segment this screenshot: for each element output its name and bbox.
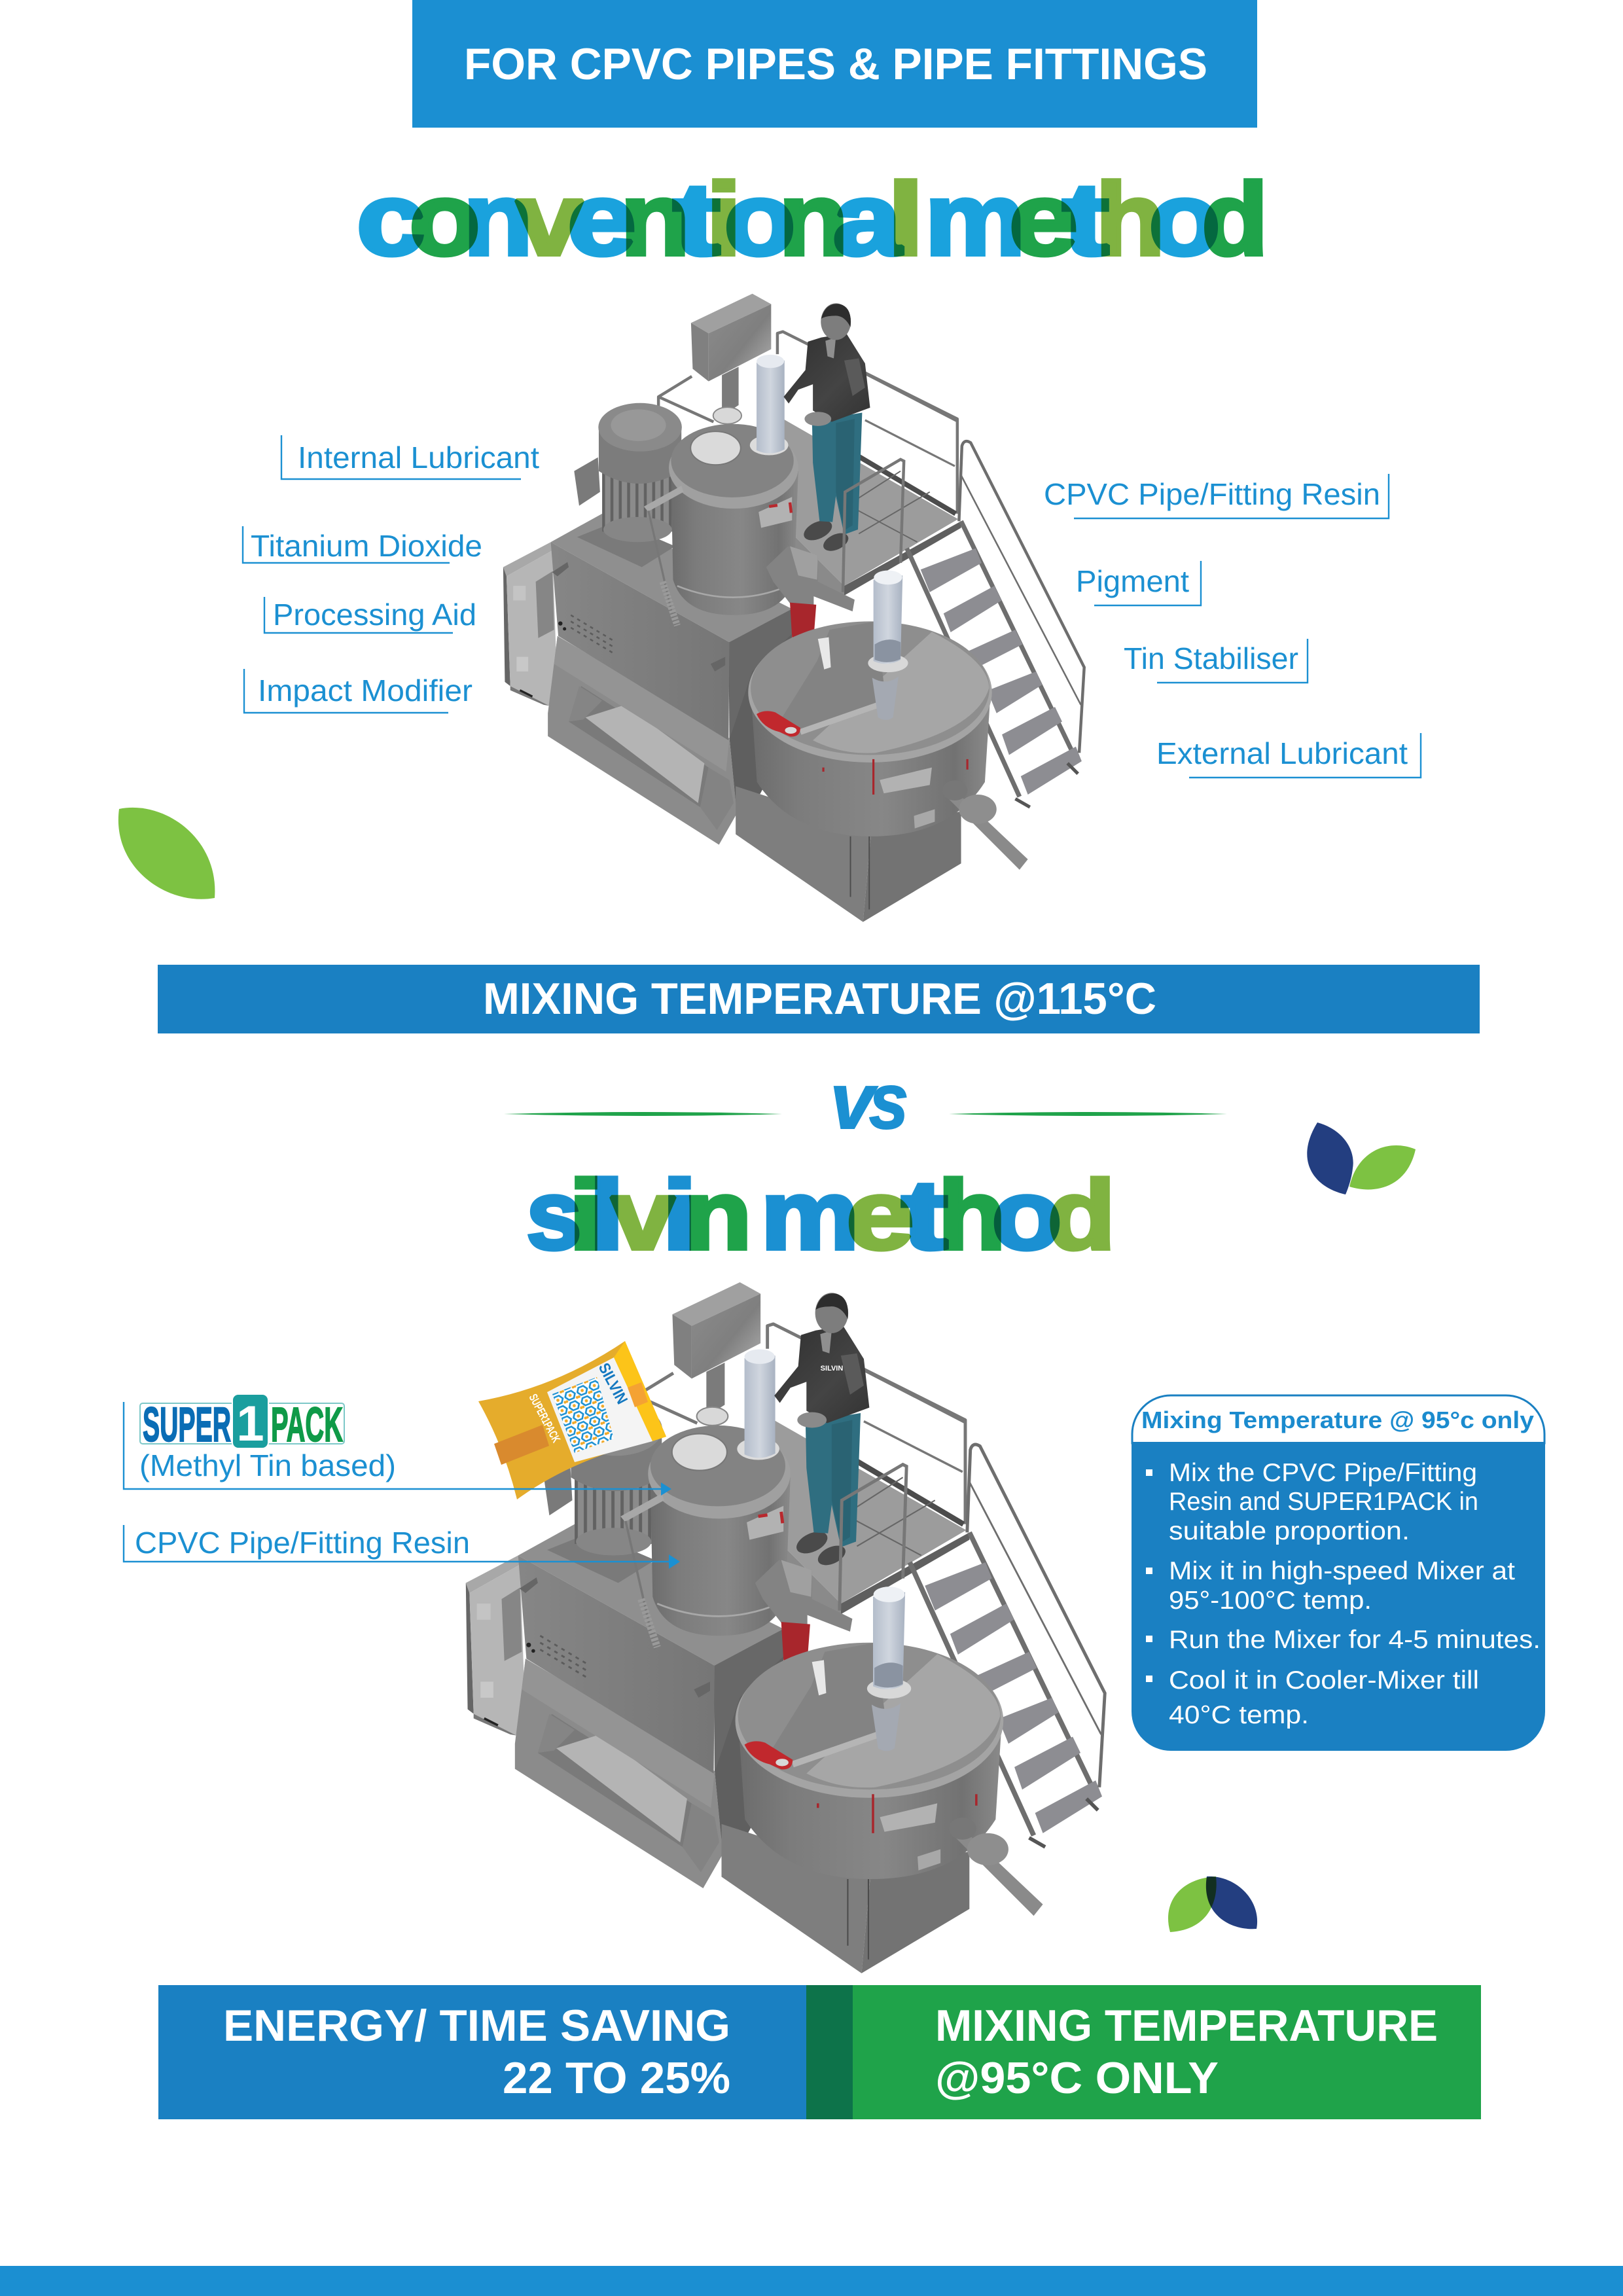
- heading: conventional method: l: [887, 162, 924, 277]
- step 4: 40°C temp.: [1169, 1701, 1309, 1729]
- ingredient label: Pigment: [1076, 561, 1201, 605]
- back railings: [658, 332, 957, 514]
- step 1: Mix the CPVC Pipe/Fitting: [1169, 1459, 1477, 1487]
- bottom banner: energy saving and mixing temperature: [158, 1985, 1481, 2119]
- footer bar: [0, 2266, 1623, 2296]
- logo: Super 1 Pack with methyl tin note: PACK: [271, 1397, 343, 1452]
- vs divider: v: [830, 1056, 878, 1145]
- glass measuring cylinder, upper: [750, 355, 788, 456]
- energy saving text: ENERGY/ TIME SAVING: [223, 2001, 730, 2051]
- illustration: silvin mixer machine: SILVIN: [821, 1365, 843, 1372]
- ingredient label: Impact Modifier: [244, 669, 473, 713]
- logo: Super 1 Pack with methyl tin note: 1: [236, 1396, 264, 1452]
- ingredient label: Internal Lubricant: Internal Lubricant: [298, 440, 539, 475]
- logo: Super 1 Pack with methyl tin note: SUPER: [143, 1397, 231, 1452]
- rear filler between base and cooler: [728, 609, 792, 816]
- mixing temperature text: [935, 2001, 1438, 2103]
- vs divider: [504, 1056, 1227, 1145]
- product bag: Super 1 Pack: [478, 1341, 666, 1499]
- step 2: 95°-100°C temp.: [1169, 1587, 1372, 1615]
- heading: silvin method: n: [684, 1160, 752, 1270]
- operator figure: [783, 303, 870, 554]
- cooler mixer pedestal: [736, 786, 961, 922]
- heading: silvin method: h: [938, 1160, 1006, 1270]
- logo: Super 1 Pack with methyl tin note: [124, 1394, 671, 1496]
- heading: silvin method: i: [662, 1160, 698, 1270]
- ingredient label: Titanium Dioxide: Titanium Dioxide: [251, 529, 482, 563]
- heading: conventional method: c: [357, 162, 425, 276]
- step 1: suitable proportion.: [1169, 1517, 1410, 1545]
- step 1: [1146, 1459, 1478, 1545]
- illustration: silvin mixer machine: [466, 1282, 1105, 1973]
- step 3: Run the Mixer for 4-5 minutes.: [1169, 1626, 1541, 1654]
- panel: process steps at 95 C: [1132, 1395, 1545, 1751]
- banner: mixing temperature 115 C: MIXING TEMPERATURE @115°C: [483, 974, 1156, 1024]
- platform floor: [779, 417, 961, 598]
- mixing temperature text: MIXING TEMPERATURE: [935, 2001, 1438, 2051]
- step 2: [1146, 1557, 1515, 1615]
- mixing temperature text: @95°C ONLY: [935, 2053, 1219, 2103]
- heading: silvin method: t: [902, 1160, 948, 1270]
- heading: conventional method: o: [409, 162, 480, 277]
- discharge Y-pipe with red coupling: [766, 547, 855, 642]
- base frame with legs: [548, 636, 737, 845]
- step 1: Resin and SUPER1PACK in: [1169, 1488, 1478, 1516]
- ingredient label: Tin Stabiliser: Tin Stabiliser: [1124, 641, 1298, 675]
- heading: silvin method: d: [1048, 1160, 1115, 1270]
- panel heading: Mixing Temperature @ 95°c only: [1141, 1407, 1534, 1433]
- ingredient label: CPVC Pipe/Fitting Resin: CPVC Pipe/Fitting Resin: [1044, 477, 1380, 511]
- heading: conventional method: o: [1149, 162, 1221, 277]
- heading: conventional method: m: [925, 162, 1026, 276]
- ingredient label: Processing Aid: Processing Aid: [273, 598, 476, 632]
- top banner: for CPVC pipes and pipe fittings: FOR CPVC PIPES & PIPE FITTINGS: [464, 39, 1207, 89]
- heading: conventional method: n: [463, 162, 533, 277]
- heading: silvin method: s: [526, 1160, 582, 1270]
- heading: silvin method: v: [611, 1160, 675, 1270]
- logo: Super 1 Pack with methyl tin note: (Methyl Tin based): [139, 1448, 396, 1482]
- heading: conventional method: t: [673, 162, 721, 277]
- heading: conventional method: [357, 161, 1268, 277]
- motor: [574, 403, 682, 567]
- upper high-speed mixer vessel: [644, 407, 798, 628]
- product bag: Super 1 Pack: SILVIN: [595, 1360, 631, 1407]
- label with arrow: CPVC Pipe/Fitting Resin: [124, 1525, 680, 1569]
- control box on a stand: [691, 294, 771, 416]
- heading: silvin method: l: [588, 1160, 625, 1270]
- ingredient label: Impact Modifier: Impact Modifier: [258, 673, 473, 708]
- heading: conventional method: e: [567, 161, 636, 276]
- top banner: for CPVC pipes and pipe fittings: [412, 0, 1257, 128]
- icon: green and navy leaves: [1168, 1876, 1257, 1932]
- heading: conventional method: t: [1062, 162, 1109, 277]
- heading: silvin method: i: [568, 1160, 604, 1270]
- vs divider: s: [869, 1058, 908, 1145]
- heading: conventional method: i: [705, 162, 742, 277]
- label with arrow: CPVC Pipe/Fitting Resin: CPVC Pipe/Fitting Resin: [135, 1526, 470, 1560]
- heading: conventional method: e: [1009, 161, 1078, 276]
- icon: navy and green leaves: [1307, 1122, 1416, 1194]
- heading: conventional method: n: [620, 162, 690, 277]
- discharge pipe and valve: [942, 780, 1028, 870]
- banner: mixing temperature 115 C: [158, 965, 1480, 1033]
- front short railing: [843, 459, 904, 592]
- lower glass measuring cylinder: [868, 571, 908, 720]
- heading: conventional method: n: [779, 162, 848, 277]
- illustration: conventional mixer machine: [503, 294, 1084, 922]
- heading: conventional method: a: [833, 162, 902, 276]
- stairs: [907, 441, 1084, 807]
- heading: silvin method: e: [846, 1160, 914, 1270]
- product bag: Super 1 Pack: SUPER1PACK: [526, 1391, 563, 1444]
- heading: silvin method: [526, 1160, 1115, 1270]
- cooler mixer vessel: [748, 621, 992, 836]
- red clamp: [757, 711, 800, 737]
- step 2: Mix it in high-speed Mixer at: [1169, 1557, 1515, 1585]
- ingredient label: External Lubricant: External Lubricant: [1156, 736, 1408, 770]
- heading: conventional method: v: [516, 162, 583, 277]
- heading: silvin method: m: [760, 1160, 859, 1270]
- heading: conventional method: d: [1202, 162, 1268, 277]
- icon: green leaf: [118, 808, 215, 899]
- step 4: Cool it in Cooler-Mixer till: [1169, 1666, 1479, 1695]
- ingredient label: Internal Lubricant: [281, 435, 539, 479]
- heading: conventional method: h: [1096, 162, 1165, 277]
- energy saving text: 22 TO 25%: [503, 2053, 730, 2103]
- ingredient label: Pigment: Pigment: [1076, 564, 1189, 598]
- heading: conventional method: o: [724, 162, 796, 277]
- heading: silvin method: o: [991, 1160, 1062, 1270]
- main machine body: [551, 514, 792, 740]
- electric panel: [503, 542, 557, 706]
- step 4: [1146, 1666, 1479, 1729]
- energy saving text: [223, 2001, 730, 2103]
